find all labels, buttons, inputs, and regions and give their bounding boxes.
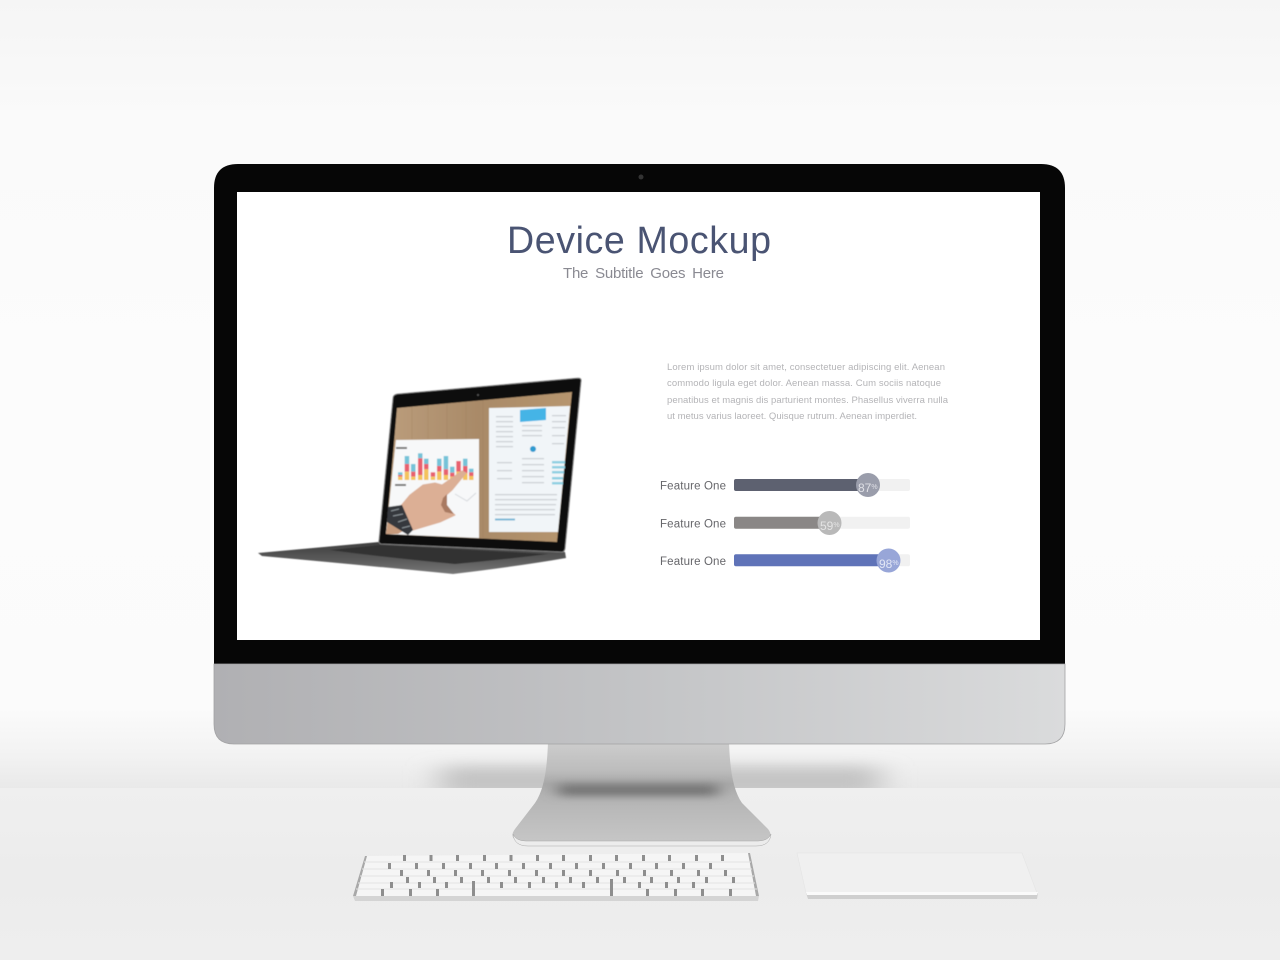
feature bar 87%	[660, 473, 910, 497]
feature bar 59%: 59	[820, 519, 833, 533]
laptop display	[386, 392, 572, 542]
chart paper	[386, 439, 479, 538]
body paragraph: Lorem ipsum dolor sit amet, consectetuer adipiscing elit. Aenean	[667, 362, 945, 373]
subtitle: The Subtitle Goes Here	[563, 265, 724, 282]
hand shadow	[441, 494, 454, 514]
monitor chin	[214, 664, 1065, 744]
key gaps	[381, 855, 735, 896]
laptop camera	[477, 394, 479, 396]
report footer link	[495, 518, 515, 520]
report teal bars	[552, 461, 565, 484]
chart heading	[396, 447, 407, 449]
monitor shadow on wall	[440, 766, 880, 796]
title: Device Mockup	[507, 219, 771, 261]
feature bar 87%: Feature One	[660, 480, 726, 492]
report paper	[489, 406, 570, 532]
report blue dot	[530, 446, 536, 452]
report text lines	[495, 415, 566, 515]
desk surface	[0, 788, 1280, 960]
body paragraph: ut metus varius laoreet. Quisque rutrum. Aenean imperdiet.	[667, 411, 917, 422]
monitor bezel	[214, 164, 1065, 664]
wood background	[386, 392, 572, 542]
monitor stand	[512, 742, 771, 846]
stand shadow band	[558, 784, 718, 796]
feature bar 59%	[660, 511, 910, 535]
arm	[386, 520, 403, 534]
feature bar 59%: Feature One	[660, 518, 726, 530]
stacked bars	[398, 453, 474, 480]
body paragraph: penatibus et magnis dis parturient montes. Phasellus viverra nulla	[667, 395, 949, 406]
report blue header	[520, 408, 546, 422]
trackpad	[797, 853, 1038, 899]
wood grain	[412, 400, 483, 537]
wrist watch	[387, 505, 413, 535]
laptop base	[258, 542, 566, 574]
feature bar 98%: %	[892, 560, 899, 567]
feature bar 98%: Feature One	[660, 556, 726, 568]
key row lines	[356, 862, 757, 889]
chart subheading	[395, 484, 406, 486]
webcam	[638, 174, 644, 180]
monitor	[214, 164, 1065, 744]
body paragraph: commodo ligula eget dolor. Aenean massa. Cum sociis natoque	[667, 378, 941, 389]
screen slide	[237, 192, 1040, 640]
feature bar 59%: %	[833, 522, 840, 529]
body paragraph	[667, 362, 949, 422]
feature bar 87%: 87	[858, 481, 871, 495]
hand	[400, 471, 466, 530]
laptop image	[258, 378, 581, 574]
laptop lid	[379, 378, 581, 552]
sketch on paper	[455, 493, 476, 501]
keyboard	[353, 853, 759, 901]
feature bar 98%: 98	[879, 557, 892, 571]
feature bar 87%: %	[871, 484, 878, 491]
watch highlights	[391, 509, 410, 528]
feature bar 98%	[660, 548, 910, 572]
